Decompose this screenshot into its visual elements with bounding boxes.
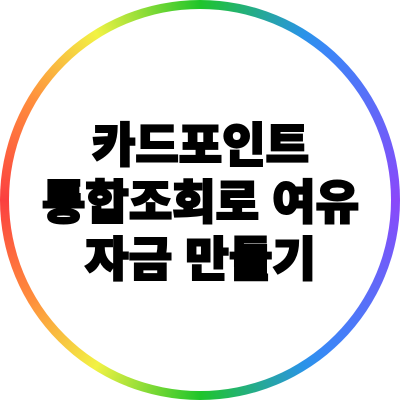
title line 2: 통합조회로 여유 xyxy=(42,176,359,229)
title line 3: 자금 만들기 xyxy=(85,233,316,286)
title line 1: 카드포인트 xyxy=(92,119,309,172)
